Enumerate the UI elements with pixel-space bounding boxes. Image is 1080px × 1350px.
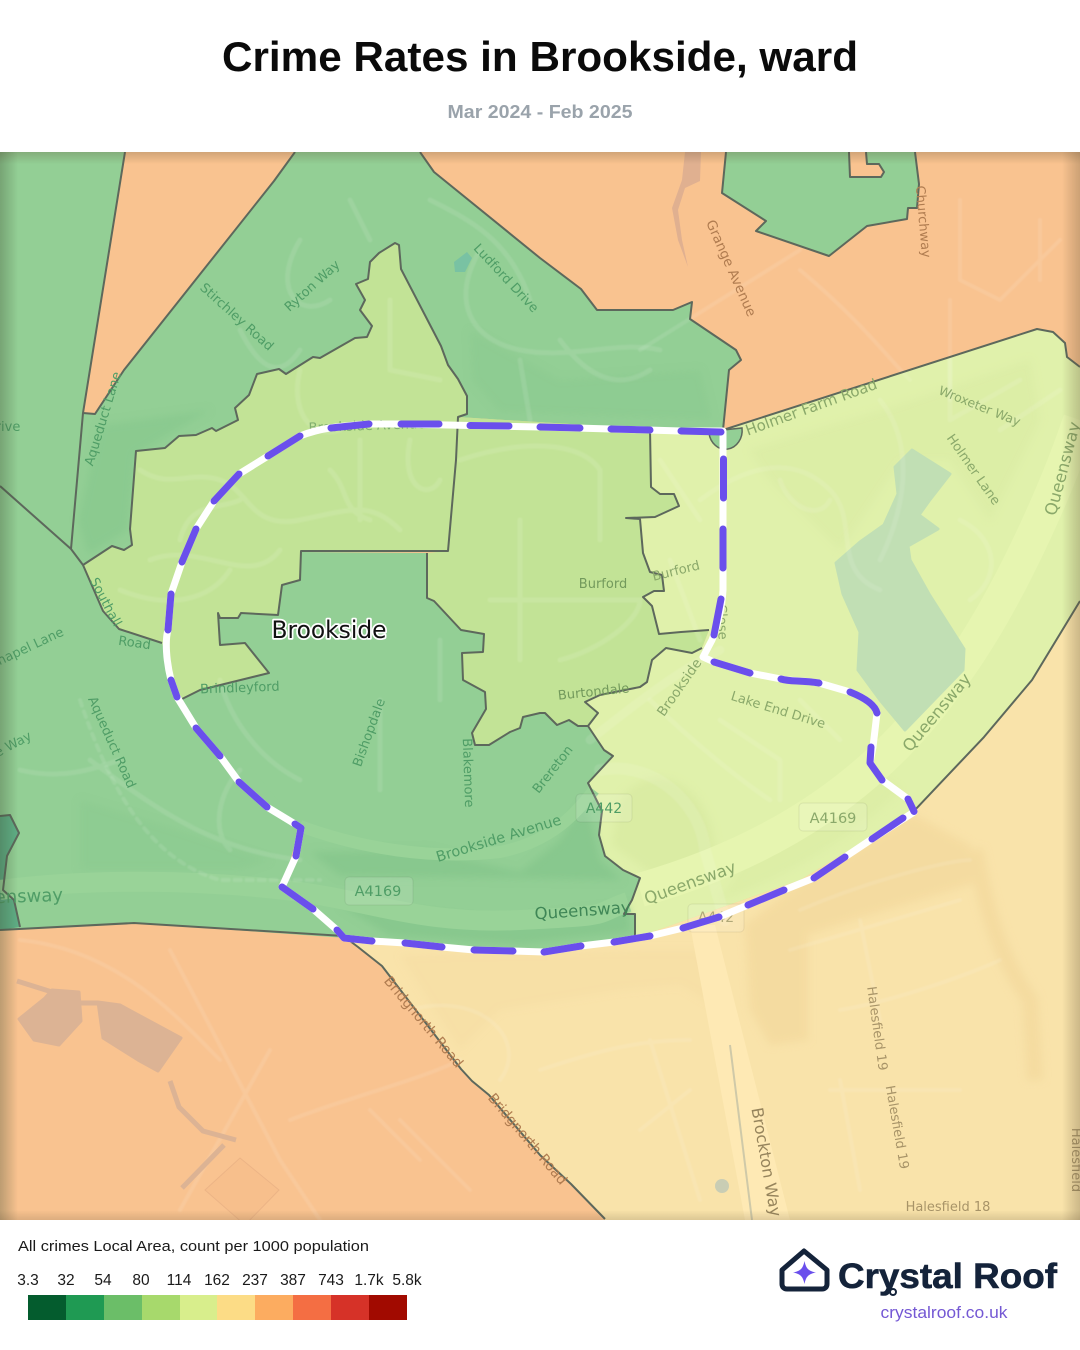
- region: yellow south-east: [346, 601, 1080, 1220]
- map labels: streets on orange: Bridgnorth Road: [484, 1091, 570, 1188]
- legend scale labels: 5.8k: [392, 1272, 422, 1289]
- legend scale labels: 387: [280, 1272, 306, 1289]
- map labels: streets on green: Brereton: [530, 743, 576, 797]
- map edge vignette: [0, 152, 1080, 1220]
- map base: orange high-crime area: [0, 152, 1080, 1220]
- website link: crystalroof.co.uk: [880, 1304, 1008, 1322]
- map labels: streets on green: Road: [117, 634, 152, 653]
- green darker patches: [86, 422, 634, 942]
- region: north green block: [722, 152, 919, 256]
- map labels: streets on green: Brookside Avenue: [434, 813, 563, 866]
- ward name label: Brookside: [272, 616, 386, 644]
- wards boundaries: [0, 152, 1080, 1219]
- region: light green centre: [427, 417, 709, 745]
- map labels: streets on pale green: Queensway: [899, 669, 975, 755]
- map labels: streets on pale green: Burtondale: [557, 681, 630, 704]
- map labels: streets on pale green: Brookside: [654, 656, 705, 720]
- legend scale labels: [17, 1272, 422, 1289]
- Brockton Way road band: [690, 925, 790, 1220]
- legend scale labels: 743: [318, 1272, 344, 1289]
- legend scale labels: 162: [204, 1272, 230, 1289]
- map labels: streets on green: Blakemore: [459, 738, 476, 808]
- map labels: streets on green: Brindleyford: [200, 680, 280, 697]
- legend title: All crimes Local Area, count per 1000 population: [18, 1238, 369, 1255]
- map labels: streets on green: Ludford Drive: [470, 241, 541, 316]
- map labels: streets on pale green: Close: [713, 604, 730, 640]
- map labels: streets on green: A442: [586, 801, 622, 817]
- marker dot: [715, 1179, 729, 1193]
- pond east: [98, 1002, 181, 1071]
- map labels: streets on orange: [380, 185, 933, 1188]
- map labels: streets on green: A4169: [355, 884, 401, 900]
- legend scale labels: 114: [167, 1272, 192, 1289]
- road: Brockton Way separator: [730, 1045, 752, 1220]
- map labels: streets on green: Bishopdale: [350, 697, 389, 769]
- map labels: streets on pale green: Burford: [579, 577, 627, 592]
- lake: [836, 450, 964, 730]
- panel: choropleth map: [0, 152, 1080, 1225]
- pale green darker estates: [612, 360, 1040, 900]
- map labels: streets on yellow: Halesfield 19: [863, 985, 890, 1072]
- map labels: streets on pale green: Queensway: [642, 857, 739, 908]
- small pond north: [454, 252, 472, 272]
- map labels: streets on orange: Churchway: [912, 185, 933, 259]
- region: light green north-west: [83, 243, 467, 700]
- map labels: streets on yellow: [747, 985, 1080, 1218]
- map labels: streets on green: Brookside Avenue: [308, 417, 425, 436]
- map labels: streets on pale green: A442: [698, 910, 734, 926]
- map labels: streets on yellow: Halesfield 18: [906, 1200, 990, 1215]
- stream top: [672, 152, 701, 267]
- map labels: streets on green: Ryton Way: [282, 257, 344, 315]
- map labels: streets on green: Southall: [86, 575, 124, 629]
- map labels: streets on green: [0, 241, 631, 923]
- legend scale labels: 237: [242, 1272, 268, 1289]
- map labels: streets on yellow: Halesfield 19: [882, 1084, 911, 1170]
- yellow shading patches: [749, 820, 1039, 1076]
- pond west: [19, 990, 81, 1045]
- logo: wordmark: Crystal Roof: [838, 1257, 1057, 1296]
- map labels: streets on pale green: Burford: [651, 558, 701, 585]
- legend scale labels: 32: [57, 1272, 75, 1289]
- map labels: streets on green: Aqueduct Road: [84, 694, 138, 791]
- green Queensway band: [0, 882, 628, 921]
- legend scale labels: 1.7k: [354, 1272, 384, 1289]
- legend scale labels: 3.3: [17, 1272, 39, 1289]
- map labels: streets on green: Stirchley Road: [197, 281, 276, 354]
- legend scale labels: 54: [94, 1272, 112, 1289]
- map labels: streets on pale green: Lake End Drive: [729, 689, 827, 732]
- map labels: streets on green: Queensway: [534, 898, 631, 923]
- square plot: [205, 1158, 279, 1225]
- small dark green area: [0, 815, 20, 930]
- logo: house icon: [782, 1251, 827, 1289]
- map labels: streets on pale green: A4169: [810, 811, 856, 827]
- region: central green: [162, 552, 640, 952]
- pale green Queensway road band: [644, 772, 880, 882]
- map labels: streets on yellow: Brockton Way: [747, 1106, 785, 1218]
- map labels: streets on pale green: [557, 375, 1080, 926]
- map labels: streets on orange: Bridgnorth Road: [380, 974, 466, 1071]
- map labels: streets on pale green: Wroxeter Way: [937, 383, 1023, 429]
- ward boundary: purple dashes: [168, 424, 914, 952]
- legend colour bar: [28, 1295, 407, 1320]
- title: Crime Rates in Brookside, ward: [222, 33, 858, 80]
- road shields: [345, 794, 867, 932]
- streams south-west: [17, 981, 236, 1188]
- legend scale labels: 80: [132, 1272, 150, 1289]
- subtitle: date range: Mar 2024 - Feb 2025: [448, 102, 632, 122]
- ward boundary: white route: [166, 424, 914, 952]
- street network: [20, 200, 1060, 1220]
- region: west and north green: [0, 152, 741, 938]
- region: pale green east: [585, 329, 1080, 938]
- map labels: streets on pale green: Holmer Farm Road: [743, 375, 880, 439]
- map labels: streets on green: Aqueduct Lane: [82, 370, 125, 468]
- map labels: streets on orange: Grange Avenue: [702, 218, 759, 319]
- semicircle green patch: [709, 428, 742, 449]
- map labels: streets on pale green: Holmer Lane: [943, 432, 1003, 508]
- green Brookside Avenue band: [300, 790, 594, 854]
